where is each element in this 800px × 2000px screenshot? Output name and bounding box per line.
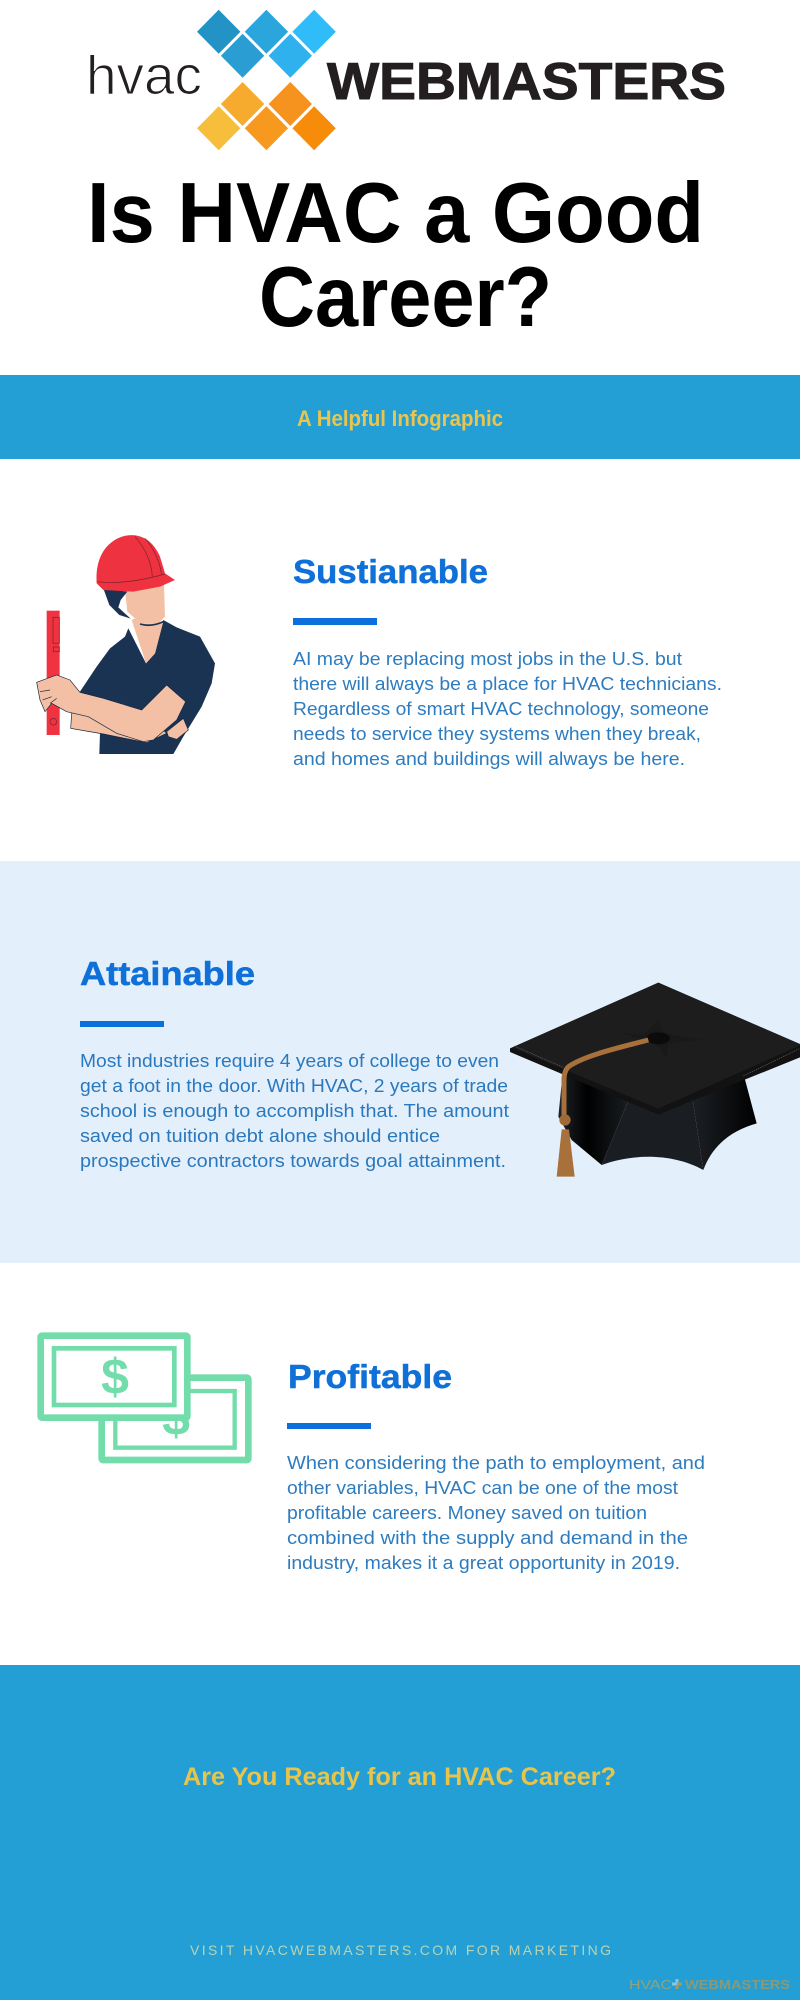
title: Career?	[259, 250, 552, 345]
panel: call to action footer	[0, 1665, 800, 2000]
subtitle: A Helpful Infographic	[297, 406, 503, 431]
rule	[293, 618, 377, 625]
body text: profitable: When considering the path to employment, and	[287, 1453, 705, 1473]
body text: sustainable: and homes and buildings will always be here.	[293, 749, 685, 769]
title: Is HVAC a Good	[87, 166, 704, 261]
panel: profitable	[0, 1263, 800, 1665]
heading: profitable: Profitable	[288, 1358, 452, 1395]
icon: money bills	[41, 1336, 248, 1460]
call to action heading: Are You Ready for an HVAC Career?	[183, 1763, 616, 1791]
icon: money bills: $	[101, 1349, 129, 1405]
body text: profitable	[287, 1453, 705, 1573]
icon: construction worker with level	[37, 535, 215, 754]
body text: profitable: industry, makes it a great opportunity in 2019.	[287, 1553, 680, 1573]
body text: profitable: other variables, HVAC can be one of the most	[287, 1478, 678, 1498]
logo mark: orange diamonds	[197, 82, 336, 150]
logo word: webmasters: WEBMASTERS	[327, 53, 726, 111]
panel: attainable	[0, 861, 800, 1263]
icon: graduation cap	[510, 983, 800, 1177]
heading: sustainable: Sustianable	[293, 553, 488, 590]
icon: money bills: $	[162, 1390, 190, 1446]
rule	[80, 1021, 164, 1027]
footer logo watermark: HVAC	[629, 1977, 672, 1992]
rule	[287, 1423, 371, 1429]
body text: attainable: saved on tuition debt alone should entice	[80, 1126, 440, 1146]
body text: sustainable	[293, 649, 722, 769]
logo word: hvac: hvac	[86, 44, 202, 106]
footer logo watermark	[629, 1977, 790, 1992]
body text: profitable: profitable careers. Money saved on tuition	[287, 1503, 647, 1523]
body text: attainable: prospective contractors towards goal attainment.	[80, 1151, 506, 1171]
footer logo watermark: WEBMASTERS	[685, 1977, 790, 1992]
panel: sustainable	[0, 459, 800, 861]
body text: attainable	[80, 1051, 509, 1171]
body text: sustainable: there will always be a place for HVAC technicians.	[293, 674, 722, 694]
visit line: VISIT HVACWEBMASTERS.COM FOR MARKETING	[190, 1942, 611, 1958]
body text: profitable: combined with the supply and demand in the	[287, 1528, 688, 1548]
body text: sustainable: needs to service they systems when they break,	[293, 724, 701, 744]
body text: attainable: Most industries require 4 years of college to even	[80, 1051, 499, 1071]
body text: attainable: get a foot in the door. With HVAC, 2 years of trade	[80, 1076, 508, 1096]
logo	[86, 10, 726, 150]
panel: subtitle band	[0, 375, 800, 459]
logo mark: blue diamonds	[197, 10, 336, 78]
heading: attainable: Attainable	[80, 955, 255, 992]
body text: sustainable: AI may be replacing most jobs in the U.S. but	[293, 649, 682, 669]
body text: sustainable: Regardless of smart HVAC technology, someone	[293, 699, 709, 719]
title	[87, 166, 704, 345]
body text: attainable: school is enough to accomplish that. The amount	[80, 1101, 509, 1121]
